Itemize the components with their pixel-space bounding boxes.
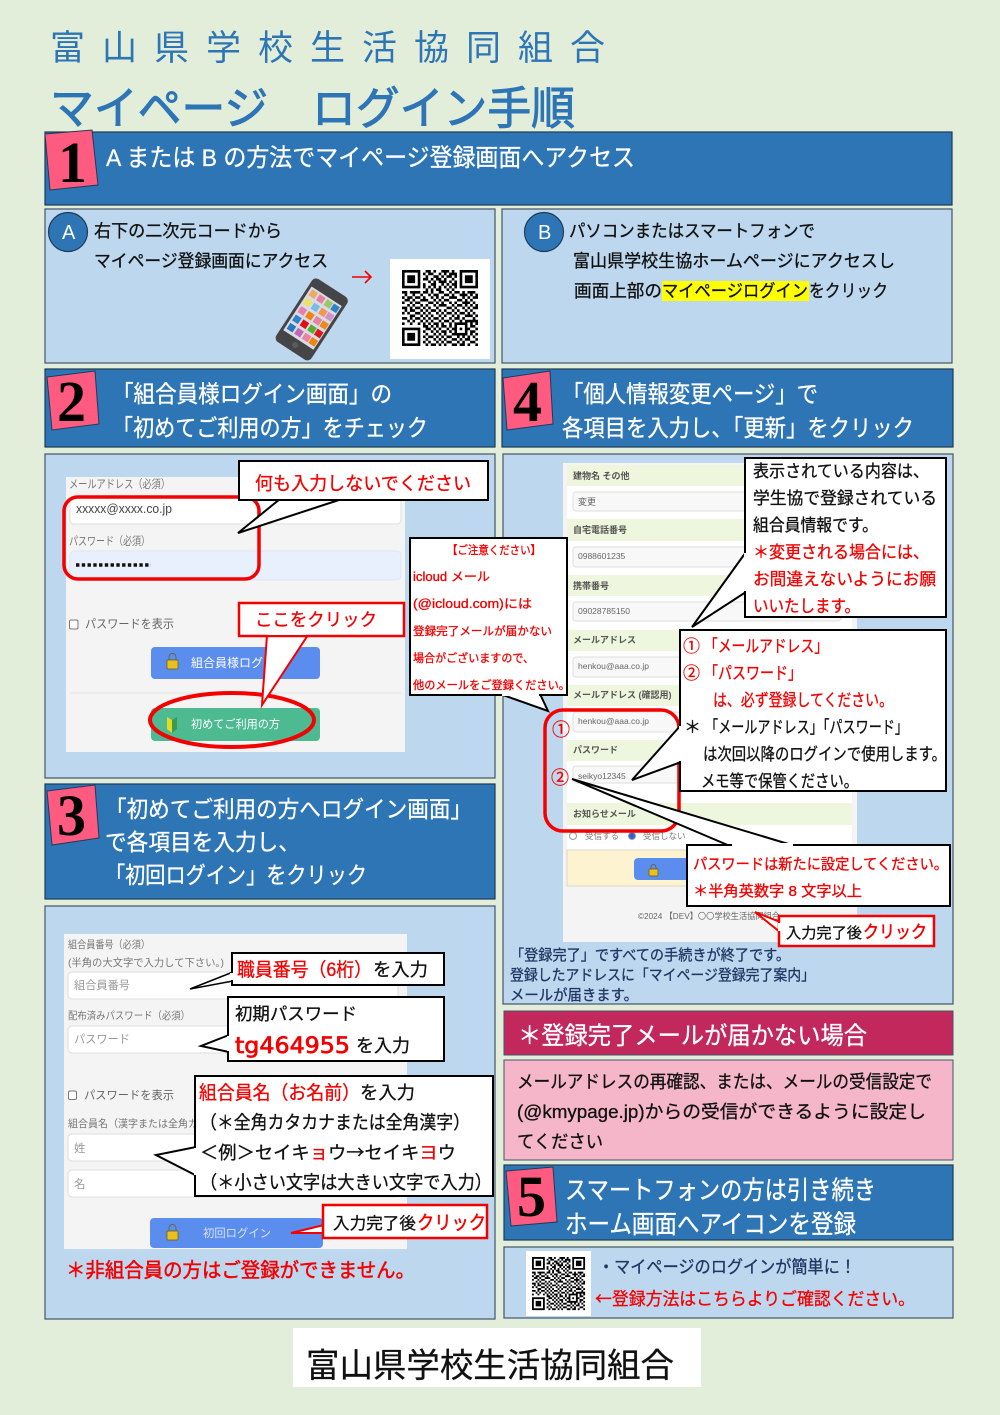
callout: required fields: は次回以降のログインで使用します。 xyxy=(703,744,946,764)
personal information screenshot: 自宅電話番号 xyxy=(573,524,627,535)
title: my page login procedure: マイページ ログイン手順 xyxy=(50,83,575,134)
panel: step 3 first login form xyxy=(45,906,495,1319)
panel: step 2 login screen xyxy=(45,454,495,778)
personal information screenshot: お知らせメール xyxy=(573,808,636,819)
step 4 number badge xyxy=(503,369,553,434)
step 2 heading: 「組合員様ログイン画面」の xyxy=(112,381,392,407)
step 4 heading: 各項目を入力し、「更新」をクリック xyxy=(562,415,914,441)
login form screenshot: メールアドレス（必須） xyxy=(69,477,170,491)
step 5 heading xyxy=(565,1177,876,1239)
callout: iCloud notice: 登録完了メールが届かない xyxy=(413,624,552,638)
registration hint: ←登録方法はこちらよりご確認ください。 xyxy=(595,1286,915,1311)
completion message: 登録したアドレスに「マイページ登録完了案内」 xyxy=(510,967,815,984)
first login form screenshot: 組合員番号 xyxy=(74,979,130,992)
personal information screenshot: メールアドレス (確認用) xyxy=(573,689,672,700)
footer organisation name xyxy=(293,1328,701,1387)
callout: registered information: いいたします。 xyxy=(753,597,860,616)
callout: click after entry (update): クリック xyxy=(863,922,927,942)
callout: click after entry (update): 入力完了後 xyxy=(786,925,862,942)
callout: required fields: 「メールアドレス」「パスワード」 xyxy=(705,718,908,737)
callout: staff number xyxy=(190,953,444,989)
step 5 number badge xyxy=(506,1164,557,1229)
banner: if completion email does not arrive xyxy=(504,1011,953,1055)
step 3 heading: 「初めてご利用の方へログイン画面」 xyxy=(105,796,472,822)
callout: initial password: tg464955 xyxy=(235,1034,350,1059)
callout: required fields xyxy=(632,630,946,791)
banner: if completion email does not arrive: ＊登録完了メールが届かない場合 xyxy=(518,1022,867,1050)
login form screenshot xyxy=(66,477,405,752)
panel: email troubleshooting: てください xyxy=(517,1132,603,1152)
callout: required fields: メモ等で保管ください。 xyxy=(701,772,858,791)
callout: new password: ＊半角英数字 8 文字以上 xyxy=(693,882,862,900)
step 3 heading xyxy=(105,796,472,888)
callout: registered information xyxy=(692,458,946,627)
first login form screenshot: 姓 xyxy=(74,1142,86,1155)
step 5 banner xyxy=(504,1164,953,1240)
step 2 number badge: 2 xyxy=(57,369,86,434)
step 3 heading: で各項目を入力し、 xyxy=(105,829,300,855)
callout: registered information: 組合員情報です。 xyxy=(753,516,878,535)
panel: email troubleshooting: (@kmypage.jp)からの受信ができるように設定し xyxy=(517,1102,926,1122)
step 2 number badge xyxy=(47,369,99,434)
callout: initial password xyxy=(201,997,444,1061)
step 5 number badge: 5 xyxy=(517,1164,546,1229)
step 4 banner xyxy=(502,369,953,447)
step 1 number badge xyxy=(45,130,98,195)
panel B instructions: 富山県学校生協ホームページにアクセスし xyxy=(573,251,895,271)
step 4 number badge: 4 xyxy=(513,369,542,434)
badge A xyxy=(48,212,88,252)
callout: member name: を入力 xyxy=(360,1083,415,1103)
personal information screenshot: 受信する xyxy=(585,831,619,841)
step 3 number badge xyxy=(47,783,99,848)
panel A instructions: 右下の二次元コードから xyxy=(94,221,282,241)
login form screenshot: 初めてご利用の方 xyxy=(191,717,280,731)
first login form screenshot: (半角の大文字で入力して下さい。) xyxy=(68,956,224,969)
badge A: A xyxy=(62,222,76,244)
callout: member name: 組合員名（お名前） xyxy=(199,1082,360,1104)
panel A instructions xyxy=(94,221,328,271)
QR code white card xyxy=(526,1251,591,1316)
warning: non-members cannot register: ＊非組合員の方はご登録ができません。 xyxy=(66,1259,415,1282)
footer organisation name: 富山県学校生活協同組合 xyxy=(306,1348,674,1385)
callout: do not enter anything xyxy=(238,461,488,533)
login form screenshot: パスワード（必須） xyxy=(69,534,150,548)
first login form screenshot: 配布済みパスワード（必須） xyxy=(68,1009,190,1022)
callout: member name: （＊小さい文字は大きい文字で入力） xyxy=(200,1172,492,1193)
first login form screenshot: 初回ログイン xyxy=(203,1226,271,1240)
benefit text: ・マイページのログインが簡単に！ xyxy=(598,1257,856,1277)
callout: staff number: を入力 xyxy=(373,960,428,980)
callout: staff number: 職員番号（6桁） xyxy=(237,959,372,981)
callout: click here xyxy=(239,603,404,705)
callout: required fields: ② xyxy=(683,664,700,683)
step 2 heading: 「初めてご利用の方」をチェック xyxy=(112,415,428,441)
callout: member name: （＊全角カタカナまたは全角漢字） xyxy=(200,1112,470,1133)
callout: iCloud notice: 【ご注意ください】 xyxy=(447,543,541,557)
login form screenshot: xxxxx@xxxx.co.jp xyxy=(76,501,172,516)
red highlight: first-time button xyxy=(150,693,314,747)
step 2 heading xyxy=(112,381,428,441)
step 4 heading: 「個人情報変更ページ」で xyxy=(562,381,818,407)
callout: registered information: お間違えないようにお願 xyxy=(753,570,936,589)
callout: member name xyxy=(156,1076,493,1196)
login form screenshot: パスワードを表示 xyxy=(85,617,174,631)
first login form screenshot xyxy=(64,934,407,1249)
step 5 heading: ホーム画面へアイコンを登録 xyxy=(565,1211,856,1239)
red highlight: email and password fields xyxy=(64,497,259,579)
first login form screenshot: 名 xyxy=(74,1177,86,1191)
panel A instructions: マイページ登録画面にアクセス xyxy=(94,251,328,271)
callout: iCloud notice: icloud メール xyxy=(413,570,490,584)
panel B instructions: をクリック xyxy=(809,281,888,301)
personal information screenshot: henkou@aaa.co.jp xyxy=(578,716,649,726)
callout: registered information: 学生協で登録されている xyxy=(753,489,937,508)
step 5 heading: スマートフォンの方は引き続き xyxy=(565,1177,876,1205)
callout: member name: ＜例＞セイキョウ→セイキヨウ xyxy=(200,1139,456,1165)
first login form screenshot: パスワードを表示 xyxy=(84,1089,174,1102)
personal information screenshot: 携帯番号 xyxy=(573,580,609,591)
callout: required fields: は、必ず登録してください。 xyxy=(713,691,893,710)
panel B instructions xyxy=(569,221,895,301)
completion message: メールが届きます。 xyxy=(510,987,638,1004)
badge B xyxy=(524,212,564,252)
personal information screenshot: 09028785150 xyxy=(578,606,630,616)
callout: initial password: を入力 xyxy=(356,1036,410,1056)
personal information screenshot: 受信しない xyxy=(643,831,686,841)
callout: registered information: 表示されている内容は、 xyxy=(753,462,929,481)
QR code xyxy=(402,270,478,346)
panel: email troubleshooting: メールアドレスの再確認、または、メールの受信設定で xyxy=(517,1072,932,1092)
panel B instructions: 画面上部の xyxy=(574,281,662,301)
personal information screenshot: 変更 xyxy=(578,496,596,507)
panel A: QR code access xyxy=(45,209,495,363)
panel: step 4 personal information xyxy=(503,454,953,1004)
callout: iCloud notice: 他のメールをご登録ください。 xyxy=(413,678,570,692)
badge B: B xyxy=(538,222,551,244)
personal information screenshot: 0988601235 xyxy=(578,551,626,561)
callout: iCloud notice xyxy=(410,538,570,711)
panel B instructions: パソコンまたはスマートフォンで xyxy=(569,221,815,241)
marker 1: ① xyxy=(552,720,570,740)
step 1 banner xyxy=(45,130,952,205)
panel B instructions: マイページログイン xyxy=(662,281,808,301)
red highlight: email and password inputs xyxy=(545,710,679,831)
callout: iCloud notice: 場合がございますので、 xyxy=(413,651,534,665)
personal information screenshot: ©2024 【DEV】〇〇学校生活協同組合 xyxy=(638,911,780,921)
first login form screenshot: パスワード xyxy=(74,1033,130,1046)
step 3 heading: 「初回ログイン」をクリック xyxy=(105,862,367,888)
step 1 number badge: 1 xyxy=(58,130,87,195)
callout: required fields: 「メールアドレス」 xyxy=(704,637,828,656)
login form screenshot: 組合員様ログイン xyxy=(191,656,287,670)
callout: required fields: 「パスワード」 xyxy=(704,664,802,683)
panel B: website access xyxy=(502,209,952,363)
marker 2: ② xyxy=(551,768,569,788)
callout: click here: ここをクリック xyxy=(255,610,377,630)
personal information screenshot: seikyo12345 xyxy=(578,771,626,781)
callout: iCloud notice: (@icloud.com)には xyxy=(413,597,532,611)
step 2 banner xyxy=(45,369,495,447)
panel: email troubleshooting xyxy=(504,1060,953,1160)
callout: click after entry: 入力完了後 xyxy=(333,1214,417,1233)
step 1 heading: A または B の方法でマイページ登録画面へアクセス xyxy=(106,144,635,172)
QR code white card xyxy=(390,259,490,359)
callout: new password: パスワードは新たに設定してください。 xyxy=(693,856,948,873)
personal information screenshot: henkou@aaa.co.jp xyxy=(578,661,649,671)
step 4 heading xyxy=(562,381,914,441)
completion message xyxy=(510,947,815,1004)
callout: registered information: ＊変更される場合には、 xyxy=(753,543,929,562)
title: organisation name: 富山県学校生活協同組合 xyxy=(50,29,622,68)
personal information screenshot: パスワード xyxy=(573,745,618,755)
personal information screenshot: 建物名 その他 xyxy=(573,470,630,481)
QR code xyxy=(532,1257,585,1310)
panel: step 5 home screen icon xyxy=(504,1247,953,1318)
callout: click after entry: クリック xyxy=(417,1212,486,1234)
callout: required fields: ① xyxy=(683,637,700,656)
arrow to QR code xyxy=(352,271,371,283)
step 3 number badge: 3 xyxy=(57,783,86,848)
first login form screenshot: 組合員名（漢字または全角カ xyxy=(68,1117,198,1130)
callout: required fields: ＊ xyxy=(684,718,701,737)
personal information screenshot: メールアドレス xyxy=(573,635,636,645)
callout: new password xyxy=(572,779,950,906)
callout: click after entry (update) xyxy=(755,912,934,946)
callout: initial password: 初期パスワード xyxy=(235,1004,357,1024)
first login form screenshot: 組合員番号（必須） xyxy=(68,938,150,951)
completion message: 「登録完了」ですべての手続きが終了です。 xyxy=(510,947,790,964)
callout: click after entry xyxy=(291,1205,487,1238)
icon: smartphone xyxy=(274,277,350,362)
callout: do not enter anything: 何も入力しないでください xyxy=(255,473,471,494)
personal information screenshot xyxy=(563,463,857,942)
step 3 banner xyxy=(45,783,495,899)
